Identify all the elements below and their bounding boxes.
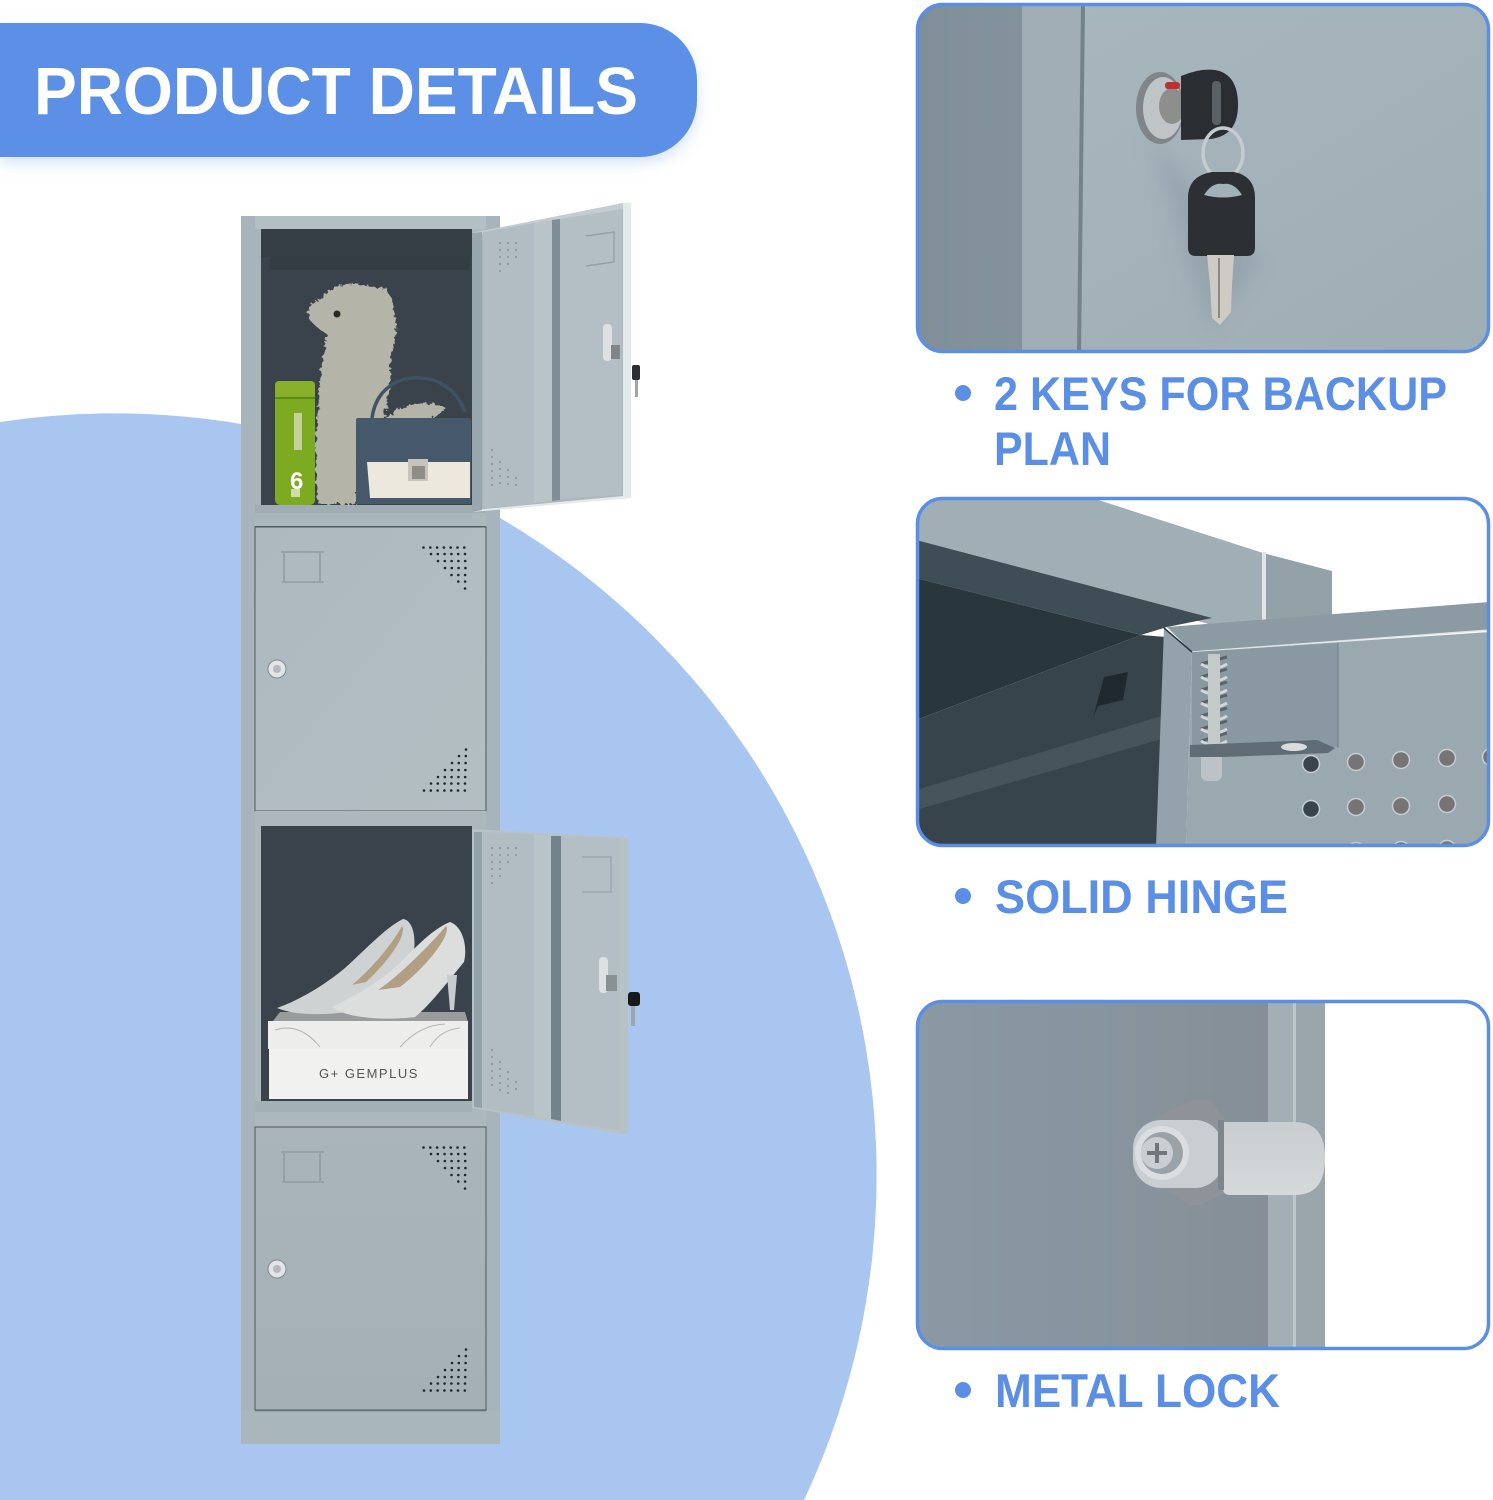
icon: lock cylinder [1136,72,1185,144]
plush toy [308,284,446,504]
perforation holes [1302,748,1487,844]
latch [603,324,612,361]
bracket [1192,643,1338,747]
door left frame [1156,628,1192,847]
title banner [0,23,697,157]
panel: keys photo [916,3,1490,353]
metal latch [1133,1120,1325,1195]
title: PRODUCT DETAILS [34,54,638,129]
hinge spring [1201,657,1227,745]
feature text: keys: PLAN [994,422,1111,475]
feature text: hinge: SOLID HINGE [995,870,1288,923]
green bottle: 6 [290,468,303,495]
panel: hinge photo [916,497,1493,860]
feature text: keys [955,367,1447,475]
latch [599,957,608,993]
door top frame [1167,602,1490,652]
third compartment [255,811,640,1135]
top compartment [255,203,640,528]
green bottle [275,381,315,505]
locker door 4 [255,1127,486,1410]
handbag [356,378,471,504]
feature text: lock: METAL LOCK [995,1364,1280,1417]
top door [472,203,640,512]
locker door 2 [255,527,486,811]
locker [241,203,640,1444]
lower door [472,829,640,1135]
locker body [241,216,500,1444]
shoe box [268,1012,468,1099]
key [632,365,640,380]
panel: lock photo [916,1000,1490,1350]
key [628,992,640,1006]
background circle [0,413,877,1500]
door inner face [1186,632,1490,847]
feature text: keys: 2 KEYS FOR BACKUP [994,367,1447,420]
shoe box: G+ GEMPLUS [319,1066,419,1081]
shoes [277,919,465,1019]
icon: key [1181,70,1255,325]
